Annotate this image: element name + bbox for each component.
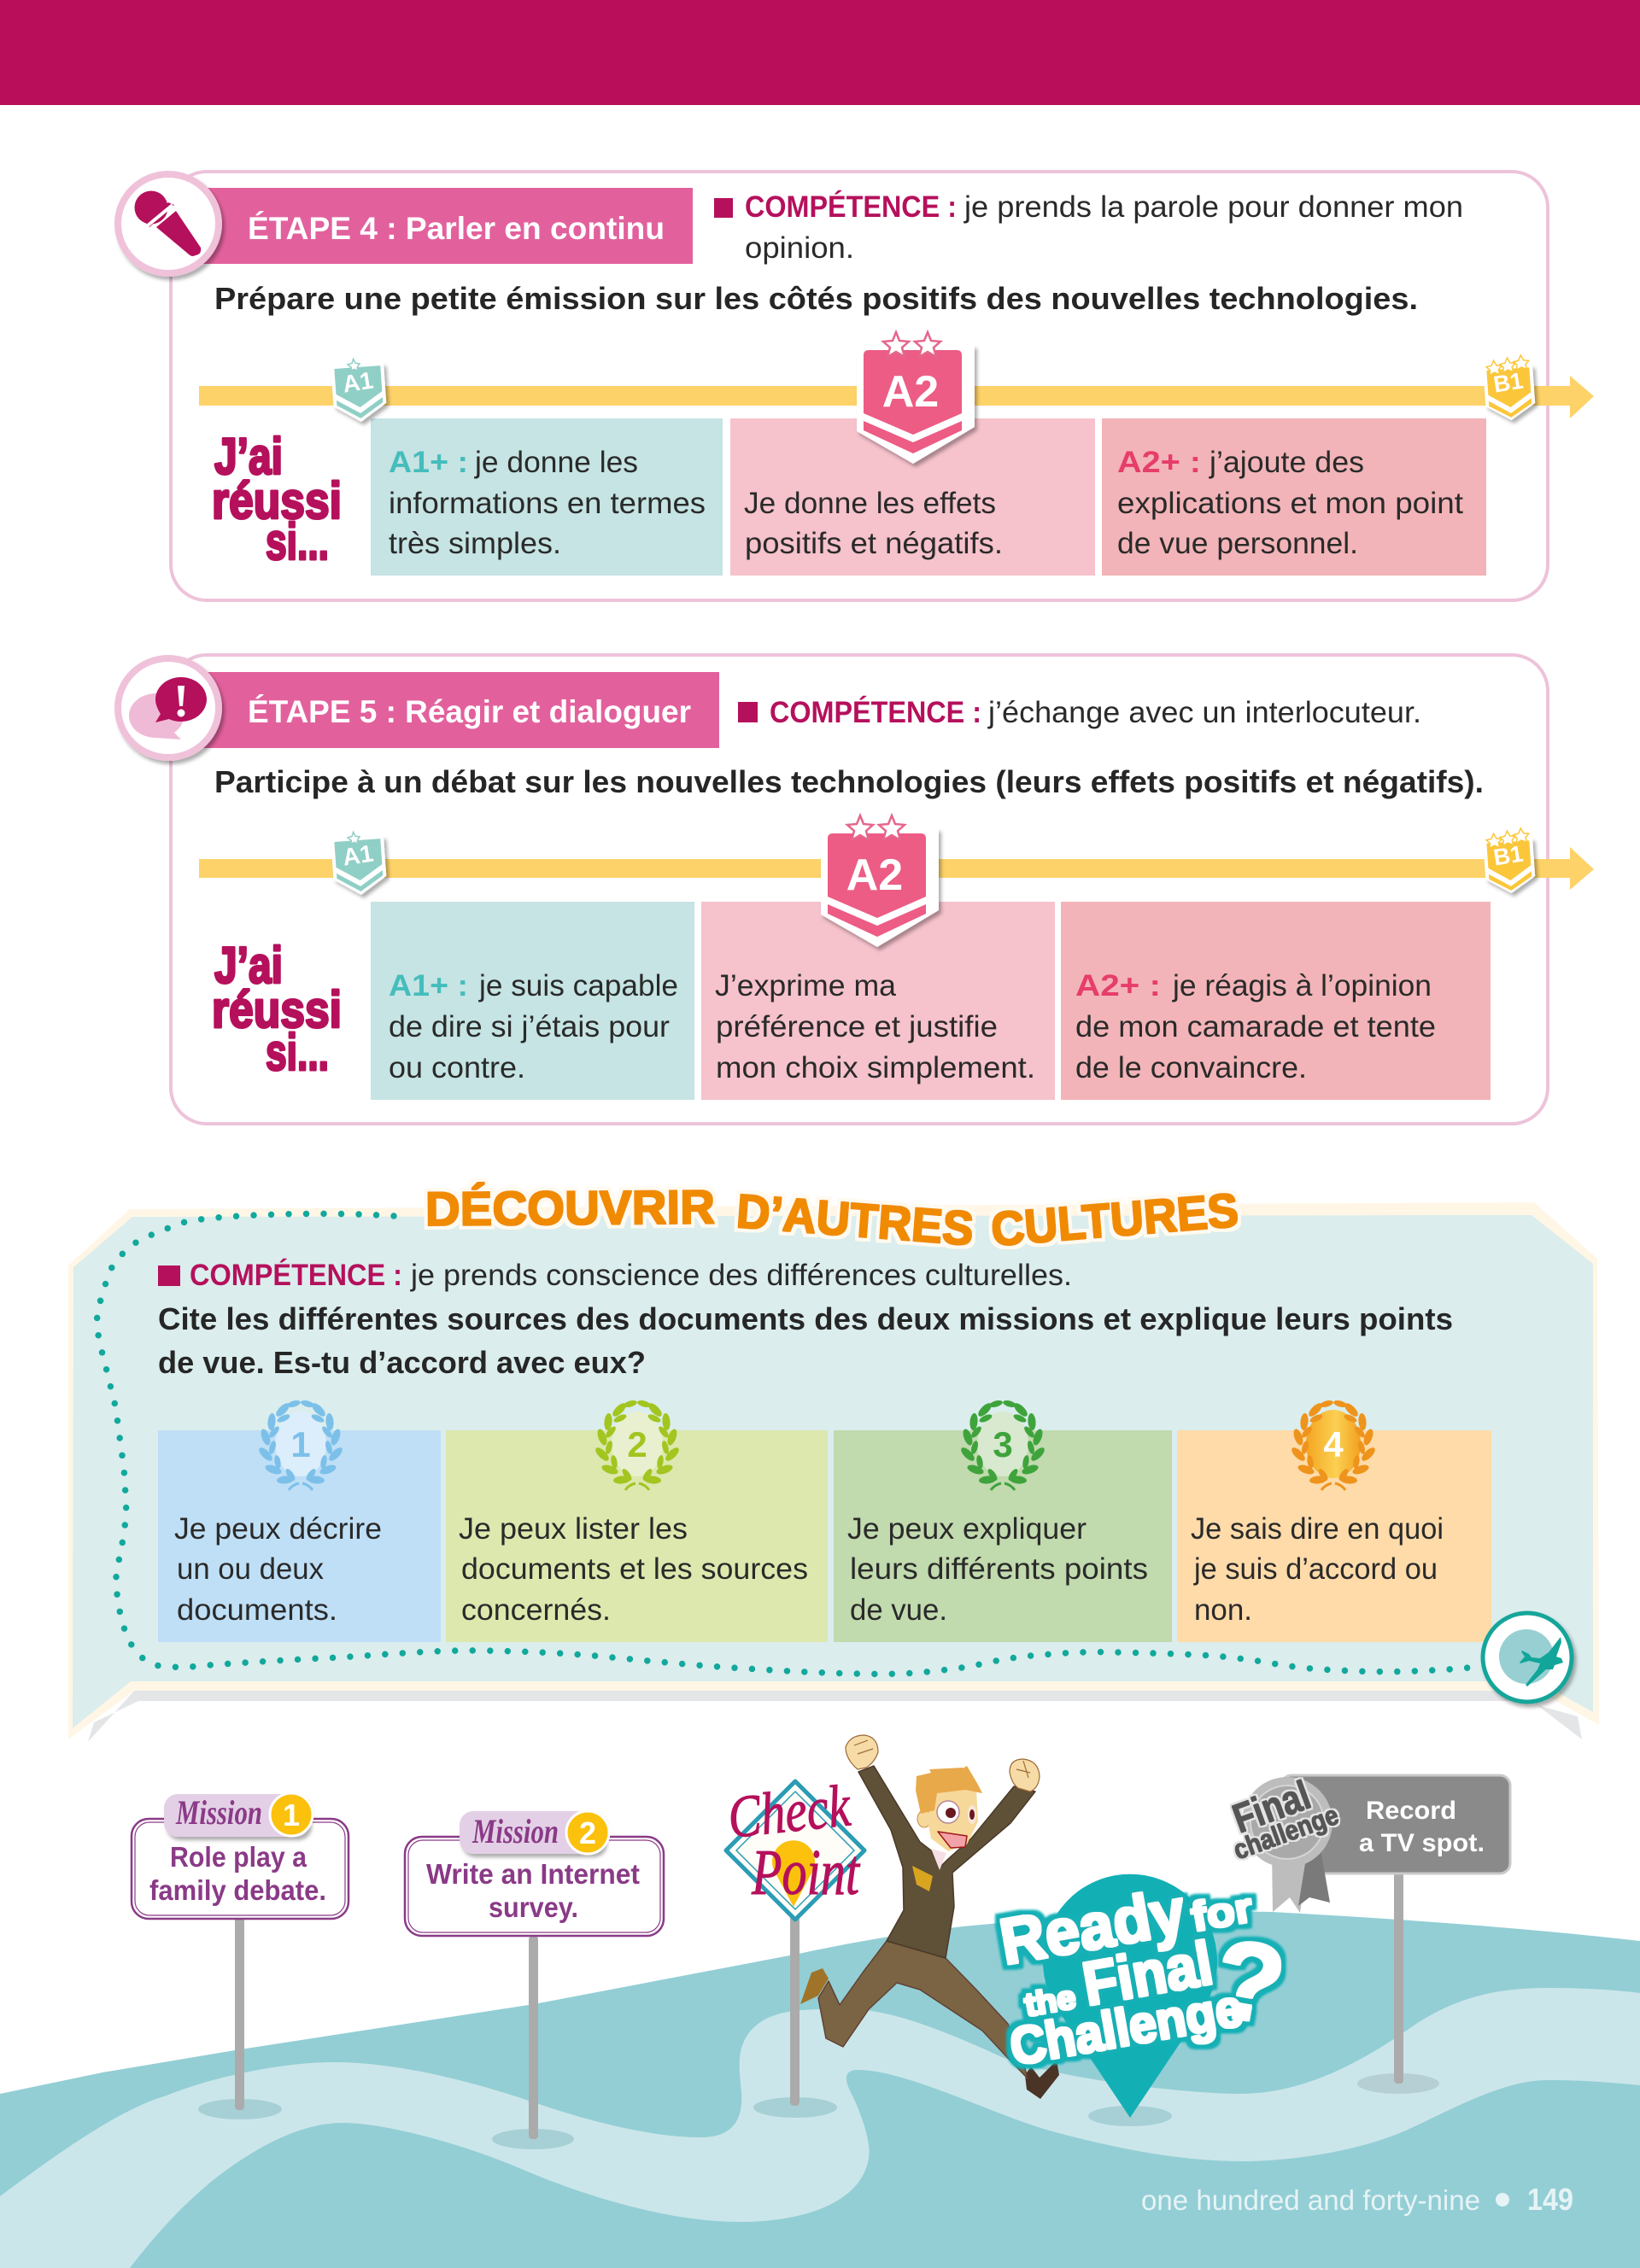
level card 2 [446,1430,828,1642]
callout: ready for the final challenge: Challenge [1005,1979,1247,2077]
landscape: winding road [0,1988,1640,2268]
label: j'ai réussi si: réussi [212,472,342,529]
fist right [1010,1759,1040,1792]
face [928,1789,978,1851]
icon: laurel 2 [594,1400,681,1490]
cell: A2+ [1102,418,1486,576]
signpost: mission 2: Write an Internet [426,1858,640,1890]
competence: étape 5: COMPÉTENCE : [770,695,981,729]
instruction: de vue. Es-tu d’accord avec eux? [158,1345,646,1380]
level card 3: Je peux expliquer [847,1512,1086,1546]
signpost: check point: Check [725,1773,854,1851]
signpost: final challenge: Record [1366,1797,1456,1825]
title: DÉCOUVRIR [425,1180,715,1236]
level card 3 [834,1430,1172,1642]
label: j'ai réussi si: si... [266,513,329,570]
icon: laurel 3 [959,1400,1046,1490]
title: D’AUTRES [735,1184,975,1255]
cell: A2 [730,418,1095,576]
crest [912,1866,933,1891]
label: j'ai réussi si: J’ai [214,428,283,485]
back shoe [800,1968,829,2004]
badge: B1: B1 [1491,841,1525,871]
level card 4: je suis d’accord ou [1193,1552,1438,1586]
signpost: mission 1 [132,1793,348,2119]
label: j'ai réussi si: réussi [212,981,342,1038]
cell: A2+: A2+ : [1075,969,1161,1002]
callout: ready for the final challenge: ? [1205,1914,1294,2049]
cell: A2+: explications et mon point [1117,487,1463,520]
instruction: étape 4: Prépare une petite émission sur les côtés positifs des nouvelles technologies. [214,281,1418,316]
callout: ready for the final challenge: Final [1078,1929,1217,2019]
signpost: mission 1: 1 [283,1797,300,1833]
badge: B1 [1482,827,1536,895]
eyes [937,1801,976,1824]
cell: A2 [701,902,1055,1100]
level card 4: non. [1194,1593,1252,1627]
hair [916,1766,982,1814]
cell: A1+: je donne les [474,446,638,479]
cell: A2+: j’ajoute des [1209,446,1364,479]
character: jumping boy [800,1735,1059,2099]
panel: étape 4 [118,172,1594,600]
instruction [158,1301,1453,1380]
level card 2: concernés. [461,1593,611,1627]
icon: plane [1483,1613,1572,1702]
sweater [858,1766,1035,1958]
label: j'ai réussi si: J’ai [214,937,283,994]
signpost: mission 1: Mission [175,1793,262,1832]
signpost: mission 1: Role play a [170,1841,308,1873]
cell: A2+: de mon camarade et tente [1075,1010,1436,1043]
signpost: final challenge [1227,1773,1510,2094]
callout: ready for the final challenge: for [1187,1885,1256,1941]
badge: A1: A1 [341,839,375,871]
instruction: Cite les différentes sources des documents des deux missions et explique leurs points [158,1301,1453,1336]
heading bar: étape 4: ÉTAPE 4 : Parler en continu [248,211,665,246]
signpost: final challenge: Final [1227,1773,1316,1842]
cell: A2: J’exprime ma [715,969,897,1002]
top band [0,0,1640,105]
icon: laurel 2: 2 [627,1424,647,1464]
signpost: final challenge: challenge [1229,1799,1343,1866]
icon: laurel 4 [1290,1400,1377,1490]
competence: étape 4: opinion. [745,231,854,265]
heading bar: étape 4 [201,188,693,264]
cell: A1+: très simples. [389,527,561,560]
cell: A2+: de vue personnel. [1117,527,1358,560]
dotted route [97,1213,1478,1674]
panel: découvrir d'autres cultures [68,1180,1599,1742]
level card 2: Je peux lister les [459,1512,688,1546]
competence: étape 4 [714,190,1463,265]
icon: speech bubbles [118,658,219,757]
callout: ready for the final challenge [987,1863,1294,2126]
level card 3: de vue. [850,1593,947,1627]
cell: A2: mon choix simplement. [716,1051,1035,1084]
signpost: mission 1: family debate. [149,1874,326,1906]
cell: A2+ [1061,902,1491,1100]
cell: A2+: de le convaincre. [1075,1051,1307,1084]
signpost: mission 2 [405,1811,664,2149]
cell: A1+: ou contre. [389,1051,525,1084]
heading bar: étape 5: ÉTAPE 5 : Réagir et dialoguer [248,694,691,729]
badge: A1 [331,830,388,897]
signpost: check point [725,1773,864,2118]
cell: A2+: A2+ : [1117,446,1201,479]
signpost: final challenge: a TV spot. [1359,1829,1485,1857]
level card 1: un ou deux [177,1552,324,1586]
front shoe [1025,2060,1059,2099]
cell: A1+ [371,902,694,1100]
cell: A2+: je réagis à l’opinion [1172,969,1432,1002]
ear [917,1810,931,1827]
icon: microphone [118,174,219,273]
cell: A2: Je donne les effets [744,487,996,520]
label: j'ai réussi si [212,428,342,570]
panel: étape 5 [118,655,1594,1124]
footer: page number: 149 [1527,2182,1573,2217]
level card 4: Je sais dire en quoi [1191,1512,1444,1546]
competence: étape 4: COMPÉTENCE : [745,190,957,224]
arrow: timeline [199,376,1594,418]
callout: ready for the final challenge: Ready [994,1875,1191,1979]
cell: A1+: A1+ : [389,446,468,479]
title: CULTURES [989,1183,1240,1256]
signpost: mission 2: Mission [472,1812,559,1850]
level card 1 [158,1430,441,1642]
label: j'ai réussi si [212,937,342,1081]
cell: A1+: de dire si j’étais pour [389,1010,670,1043]
landscape: hill [0,1911,1640,2268]
cell: A1+: A1+ : [389,969,468,1002]
mouth [938,1832,967,1848]
fist left [846,1735,878,1769]
competence: étape 5: j’échange avec un interlocuteur. [987,696,1421,729]
icon: laurel 4: 4 [1323,1424,1344,1464]
level card 3: leurs différents points [850,1552,1148,1586]
signpost: mission 2: 2 [579,1815,596,1850]
footer: page number: one hundred and forty-nine [1141,2184,1480,2216]
competence: COMPÉTENCE : [190,1258,402,1292]
level card 1: documents. [177,1593,337,1627]
competence: étape 5 [738,695,1421,729]
instruction: étape 5: Participe à un débat sur les nouvelles technologies (leurs effets positifs et négatifs). [214,764,1484,799]
trousers [818,1941,1028,2078]
cell: A2: préférence et justifie [716,1010,998,1043]
badge: B1: B1 [1491,368,1525,398]
badge: A2 [857,332,975,464]
competence [158,1258,1072,1292]
badge: A2: A2 [846,850,903,900]
label: j'ai réussi si: si... [266,1024,329,1081]
icon: laurel 3: 3 [993,1424,1013,1464]
cell: A1+ [371,418,723,576]
competence: étape 4: je prends la parole pour donner mon [964,190,1463,224]
cell: A1+: informations en termes [389,487,706,520]
callout: ready for the final challenge: the [1022,1979,1079,2024]
collar [931,1849,946,1870]
icon: laurel 1: 1 [290,1424,311,1464]
level card 1: Je peux décrire [174,1512,382,1546]
level card 2: documents et les sources [461,1552,808,1586]
badge: A1 [331,357,388,424]
competence: je prends conscience des différences culturelles. [410,1259,1072,1292]
cell: A1+: je suis capable [478,969,678,1002]
badge: A2: A2 [882,367,939,417]
badge: A2 [821,815,939,947]
level card 4 [1177,1430,1491,1642]
signpost: mission 2: survey. [489,1891,578,1923]
heading bar: étape 5 [201,672,719,748]
icon: laurel 1 [257,1400,344,1490]
cell: A2: positifs et négatifs. [745,527,1003,560]
signpost: check point: Point [751,1837,860,1909]
badge: B1 [1482,354,1536,422]
badge: A1: A1 [341,366,375,398]
title [425,1180,1240,1256]
arrow: timeline [199,847,1594,890]
